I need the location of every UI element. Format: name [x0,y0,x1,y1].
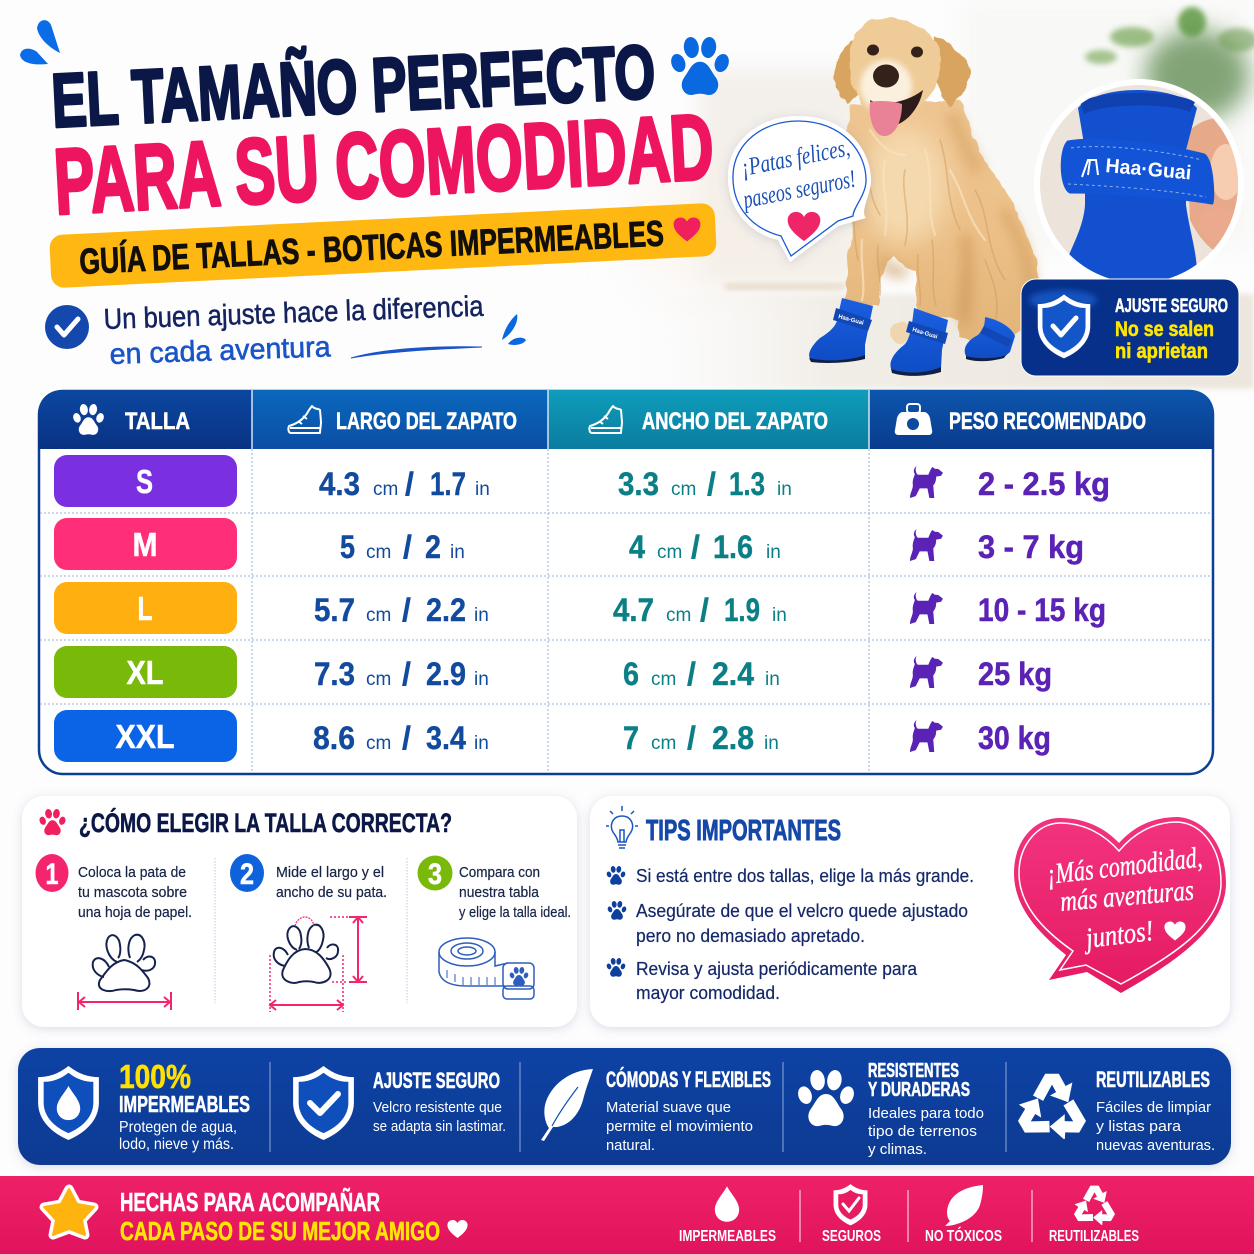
tip list: Si está entre dos tallas, elige la más grande. [636,866,974,886]
footer slogan [120,1187,468,1246]
values: largo: cm [366,542,391,563]
values: ancho [613,466,792,756]
pill L: L [138,590,152,627]
values: ancho: in [766,542,781,563]
title: PARA SU COMODIDAD [51,94,716,234]
values: ancho: cm [671,479,696,500]
values: ancho: cm [651,733,676,754]
icon: star [44,1189,94,1235]
step 3: Compara con [459,864,540,881]
tip list: Revisa y ajusta periódicamente para [636,959,918,979]
check tagline [45,291,526,371]
table frame [39,391,1213,774]
values: largo: 2 [425,529,441,565]
step 2: Mide el largo y el [276,864,384,881]
dog body [845,100,1039,344]
dog eyes and nose [867,44,923,88]
step 1: una hoja de papel. [78,904,192,921]
velcro strap [1062,140,1213,203]
values: ancho: 1.3 [729,466,765,502]
step 1: 1 [46,858,58,891]
tip list: pero no demasiado apretado. [636,926,865,946]
step 2 [230,854,387,1012]
heart callout [1014,817,1226,993]
values: largo: in [474,733,489,754]
boot upper [1060,90,1197,285]
feature: impermeables: IMPERMEABLES [119,1091,250,1117]
feature: flexibles [541,1067,771,1154]
header: ancho [548,390,869,449]
feature: reutilizables: y listas para [1096,1118,1182,1135]
values: largo: / [402,656,411,692]
badge: ajuste seguro [1021,279,1239,376]
boot middle [890,308,948,376]
dog with boots [809,18,1039,376]
decorative splash top left [20,20,60,64]
check tagline: en cada aventura [109,331,332,371]
step 3: nuestra tabla [459,884,540,901]
dog tongue [870,101,902,136]
panel: tips [590,796,1230,1027]
boot back [965,317,1015,361]
footer item: no toxicos: NO TÓXICOS [925,1226,1002,1245]
footer band [0,1176,1254,1254]
values: ancho: in [764,733,779,754]
feature: reutilizables: nuevas aventuras. [1096,1137,1215,1154]
feature: impermeables: lodo, nieve y más. [119,1136,234,1153]
speech bubble: paseos seguros! [740,166,858,214]
tip list: mayor comodidad. [636,983,780,1003]
dog fur texture [850,140,1005,325]
feature: resistentes: RESISTENTES [868,1060,959,1082]
boot left: Haa-Guai [837,314,864,327]
feature: flexibles: natural. [606,1137,655,1154]
values: ancho: in [765,669,780,690]
values: ancho: 4.7 [613,592,654,628]
step 1 [36,854,192,1010]
values: largo [313,466,490,756]
feature: impermeables [38,1058,250,1153]
feature: ajuste seguro [293,1066,506,1140]
values: largo: 1.7 [430,466,466,502]
header: talla [38,390,252,449]
feature bar [18,1048,1231,1165]
hind paw tuft [889,322,911,344]
values: ancho: / [707,466,716,502]
heading: ¿CÓMO ELEGIR LA TALLA CORRECTA? [79,807,452,838]
values: peso: 3 - 7 kg [978,529,1084,565]
feature: ajuste seguro: Velcro resistente que [373,1099,502,1116]
footer item: impermeables [679,1186,776,1245]
speech bubble: ¡Patas felices, [739,134,852,182]
speech bubble [728,116,871,262]
measuring tape icon [439,938,534,999]
values: ancho: 3.3 [618,466,659,502]
values: peso: 2 - 2.5 kg [978,466,1110,502]
badge: ajuste seguro: No se salen [1115,318,1214,341]
values: largo: / [403,529,412,565]
heart callout: juntos! [1081,915,1155,955]
step 2: 2 [240,858,254,891]
footer item: seguros: SEGUROS [822,1228,881,1245]
values: ancho: 2.4 [712,656,754,692]
boot left [809,298,873,363]
values: largo: 7.3 [314,656,355,692]
values: ancho: cm [657,542,682,563]
values: ancho: in [772,605,787,626]
footer slogan: CADA PASO DE SU MEJOR AMIGO [120,1216,440,1246]
icon: blue paw [669,36,731,95]
pill M: M [132,526,158,563]
feature: flexibles: permite el movimiento [606,1118,753,1135]
pill XL: XL [126,654,164,691]
pill L [54,582,237,634]
feature: resistentes: y climas. [868,1141,927,1158]
pill XXL [54,710,237,762]
dog muzzle [860,60,912,112]
feature: resistentes: Y DURADERAS [868,1079,970,1101]
values: ancho: / [687,656,696,692]
heading: TIPS IMPORTANTES [646,815,841,847]
values: largo: in [475,479,490,500]
paw outline with dimension arrows [270,917,367,1012]
pill S: S [136,463,153,500]
values: largo: / [402,592,411,628]
values: largo: cm [366,669,391,690]
values: largo: 4.3 [319,466,360,502]
footer slogan: HECHAS PARA ACOMPAÑAR [120,1187,380,1217]
product zoom circle [1034,79,1238,278]
values: largo: 2.9 [426,656,466,692]
dog ears [836,35,866,104]
panel: how to choose [22,796,577,1027]
values: ancho: 4 [629,529,645,565]
pill M [54,518,237,570]
values: largo: cm [366,733,391,754]
values: ancho: / [700,592,709,628]
values: ancho: in [777,479,792,500]
header: peso [869,390,1214,449]
feature: flexibles: CÓMODAS Y FLEXIBLES [606,1067,771,1092]
icon: light bulb [606,806,638,848]
badge: ajuste seguro: ni aprietan [1115,340,1208,363]
footer item: impermeables: IMPERMEABLES [679,1228,776,1245]
tip list: Asegúrate de que el velcro quede ajustado [636,901,968,921]
icon: pink paw [38,809,67,835]
values: largo: in [474,669,489,690]
values: ancho: cm [651,669,676,690]
pill S [54,455,237,507]
values: ancho: / [687,720,696,756]
dog head [849,18,941,120]
header: talla: TALLA [125,408,190,435]
dog shading [880,110,1035,330]
footer item: reutilizables [1049,1186,1139,1245]
values: largo: / [405,466,414,502]
step 1: Coloca la pata de [78,864,186,881]
step 3: y elige la talla ideal. [459,904,571,921]
header: largo [252,390,548,449]
values: ancho: 6 [623,656,639,692]
pill XXL: XXL [116,718,174,755]
values: largo: 5.7 [314,592,355,628]
values: largo: 3.4 [426,720,466,756]
footer item: reutilizables: REUTILIZABLES [1049,1228,1139,1245]
feature: ajuste seguro: se adapta sin lastimar. [373,1118,506,1135]
values: largo: 8.6 [313,720,355,756]
values: largo: in [450,542,465,563]
values: ancho: 1.6 [713,529,753,565]
step 2: ancho de su pata. [276,884,387,901]
footer item: seguros [822,1184,881,1245]
tip list [606,866,974,1003]
step 1: tu mascota sobre [78,884,187,901]
heart callout: más aventuras [1059,874,1195,918]
step 3 [418,856,571,999]
header: largo: LARGO DEL ZAPATO [336,408,517,435]
values: peso: 10 - 15 kg [978,592,1106,628]
feature: reutilizables [1011,1067,1215,1154]
feature: resistentes: Ideales para todo [868,1105,984,1122]
brand label: Haa·Guai [1105,155,1192,184]
values: peso [910,466,1110,756]
dog chest highlight [863,127,947,243]
values: ancho: 1.9 [724,592,760,628]
values: ancho: / [691,529,700,565]
paw outline with width arrow [78,935,171,1010]
header: peso: PESO RECOMENDADO [949,408,1146,435]
feature: impermeables: 100% [119,1058,191,1095]
dog mouth [870,90,923,126]
values: largo: in [474,605,489,626]
table: size guide [38,390,1214,774]
feature: resistentes [796,1060,984,1158]
values: ancho: 2.8 [712,720,754,756]
boot middle: Haa-Guai [911,327,938,341]
title: EL TAMAÑO PERFECTO [50,30,657,144]
values: largo: cm [366,605,391,626]
title [50,30,716,234]
values: largo: 5 [340,529,355,565]
footer item: no toxicos [925,1185,1002,1245]
values: peso: 25 kg [978,656,1052,692]
values: peso: 30 kg [978,720,1051,756]
values: largo: 2.2 [426,592,466,628]
subtitle banner: GUÍA DE TALLAS - BOTICAS IMPERMEABLES [78,212,665,282]
heart callout: ¡Más comodidad, [1045,842,1204,891]
values: largo: cm [373,479,398,500]
check tagline: Un buen ajuste hace la diferencia [103,291,485,336]
values: ancho: cm [666,605,691,626]
values: largo: / [402,720,411,756]
feature: resistentes: tipo de terrenos [868,1123,977,1140]
step 3: 3 [428,858,442,891]
feature: flexibles: Material suave que [606,1099,731,1116]
feature: ajuste seguro: AJUSTE SEGURO [373,1068,500,1093]
fingers [1186,118,1240,257]
pill XL [54,646,237,698]
feature: reutilizables: Fáciles de limpiar [1096,1099,1211,1116]
header: ancho: ANCHO DEL ZAPATO [642,408,828,435]
values: ancho: 7 [623,720,639,756]
feature: impermeables: Protegen de agua, [119,1119,237,1136]
